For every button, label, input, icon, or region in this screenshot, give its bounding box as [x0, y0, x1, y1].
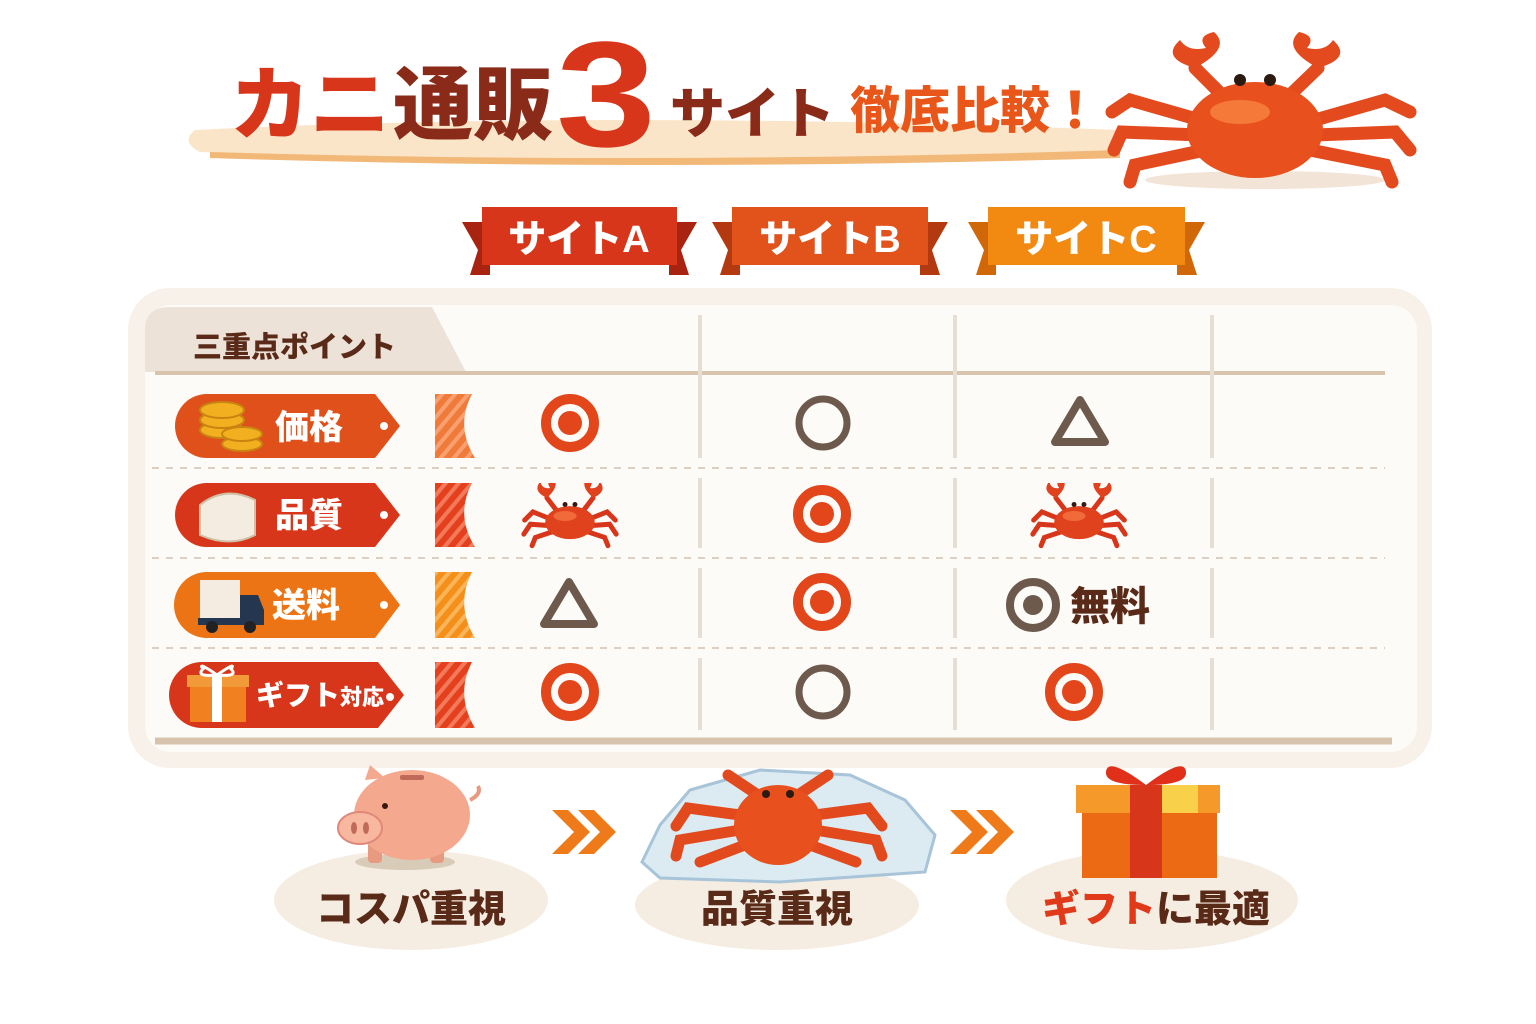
row label: 価格: 価格 [275, 409, 343, 447]
icon: piggy bank [338, 765, 479, 870]
row 送料 symbols: 無料 [1070, 585, 1150, 629]
row label: 品質: 品質 [275, 497, 343, 535]
row label: 品質 [175, 483, 400, 547]
ribbon: サイトC [968, 207, 1205, 275]
title: 通販 [393, 61, 553, 150]
arrow: chevrons 1 [552, 810, 616, 854]
card: ギフトに最適: ギフトに最適 [1042, 889, 1270, 931]
card: コスパ重視: コスパ重視 [316, 889, 506, 931]
row label: 価格 [175, 394, 400, 458]
row label: ギフト対応: ギフト対応 [256, 680, 384, 711]
card: コスパ重視 [274, 765, 548, 950]
icon: crab on ice [642, 770, 935, 882]
card: 品質重視 [635, 770, 935, 950]
icon: gift box [1076, 766, 1220, 878]
title: カニ [230, 61, 390, 150]
row label: 送料: 送料 [272, 587, 340, 625]
title [189, 10, 1120, 178]
card: ギフトに最適 [1006, 766, 1298, 950]
row label: 送料 [174, 572, 400, 638]
row 価格 symbols [546, 399, 1105, 447]
row label: ギフト対応 [169, 662, 404, 728]
stripe tabs [435, 394, 475, 728]
icon: big crab top right [1112, 32, 1410, 189]
row ギフト symbols [546, 668, 1098, 716]
ribbon: サイトB [712, 207, 948, 275]
row 送料 symbols [544, 578, 1150, 629]
title: サイト [670, 83, 835, 145]
ribbon: サイトB: サイトB [759, 219, 901, 261]
panel: comparison table [128, 288, 1432, 768]
card: 品質重視: 品質重視 [701, 889, 853, 931]
ribbon: サイトA: サイトA [508, 219, 650, 261]
row 品質 symbols [524, 478, 1125, 546]
header tab: 三重点ポイント [193, 330, 396, 364]
ribbon: サイトA [462, 207, 697, 275]
title: 3 [556, 10, 656, 178]
arrow: chevrons 2 [950, 810, 1014, 854]
ribbon: サイトC: サイトC [1015, 219, 1157, 261]
title: 徹底比較！ [850, 83, 1100, 139]
header tab [145, 307, 466, 372]
